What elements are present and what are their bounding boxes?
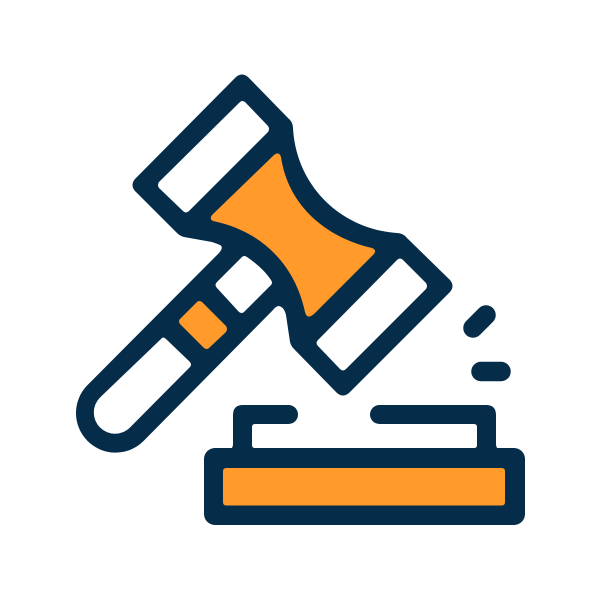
gavel outline [76, 74, 453, 453]
gavel head orange centre [211, 153, 375, 317]
diagonal dash [473, 315, 486, 328]
impact dashes [473, 315, 501, 372]
block orange inset [223, 468, 505, 506]
block top bracket [230, 405, 499, 452]
handle upper white segment [216, 256, 272, 313]
sound block [204, 405, 525, 525]
handle orange band [179, 301, 227, 349]
handle lower white grip [94, 338, 191, 434]
block base [204, 448, 525, 525]
gavel [76, 74, 453, 453]
gavel head lower white face [316, 258, 427, 370]
horizontal dash [481, 362, 501, 381]
gavel head upper white face [158, 101, 269, 212]
